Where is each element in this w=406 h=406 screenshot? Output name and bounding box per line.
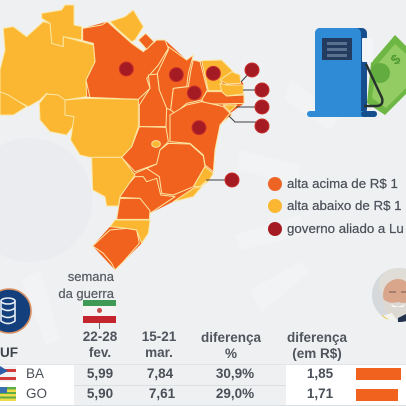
row: BA: 30,9% (216, 366, 254, 381)
row: GO: 1,71 (307, 386, 333, 401)
legend item: below R$ 1: alta abaixo de R$ 1 (287, 198, 402, 213)
callout markers east of the map (206, 62, 270, 188)
legend item: allied government: governo aliado a Lu (287, 221, 404, 236)
icon: fuel pump with banknote: $ (387, 51, 404, 68)
icon: fuel pump with banknote (307, 28, 406, 117)
row: GO: 29,0% (216, 386, 254, 401)
states above the average rise (83, 22, 244, 270)
table (0, 269, 406, 406)
row: GO (0, 385, 406, 406)
row: GO: 7,61 (149, 386, 175, 401)
icon: flag of Iran (83, 300, 116, 329)
row: GO: GO (26, 386, 47, 401)
row: BA (0, 364, 406, 386)
column headers: 15-21 mar. (142, 329, 176, 360)
icon: oil barrel badge (0, 288, 32, 334)
column headers: UF (0, 345, 18, 360)
photo of Lula (372, 268, 406, 322)
row: BA: 5,99 (87, 366, 113, 381)
row: BA: BA (26, 366, 44, 381)
note: war week: semana da guerra (58, 269, 114, 300)
legend item: above R$ 1: alta acima de R$ 1 (287, 176, 398, 191)
legend (268, 176, 404, 236)
allied government markers on the map (119, 62, 220, 135)
map of Brazil (0, 4, 244, 270)
column headers: diferença % (201, 330, 261, 360)
column headers (0, 329, 348, 361)
states below the average rise (0, 5, 243, 243)
row: BA: 7,84 (147, 366, 173, 381)
column headers: diferença (em R$) (287, 330, 347, 360)
row: GO: 5,90 (87, 386, 113, 401)
row: BA: 1,85 (307, 366, 333, 381)
column headers: 22-28 fev. (83, 329, 117, 360)
